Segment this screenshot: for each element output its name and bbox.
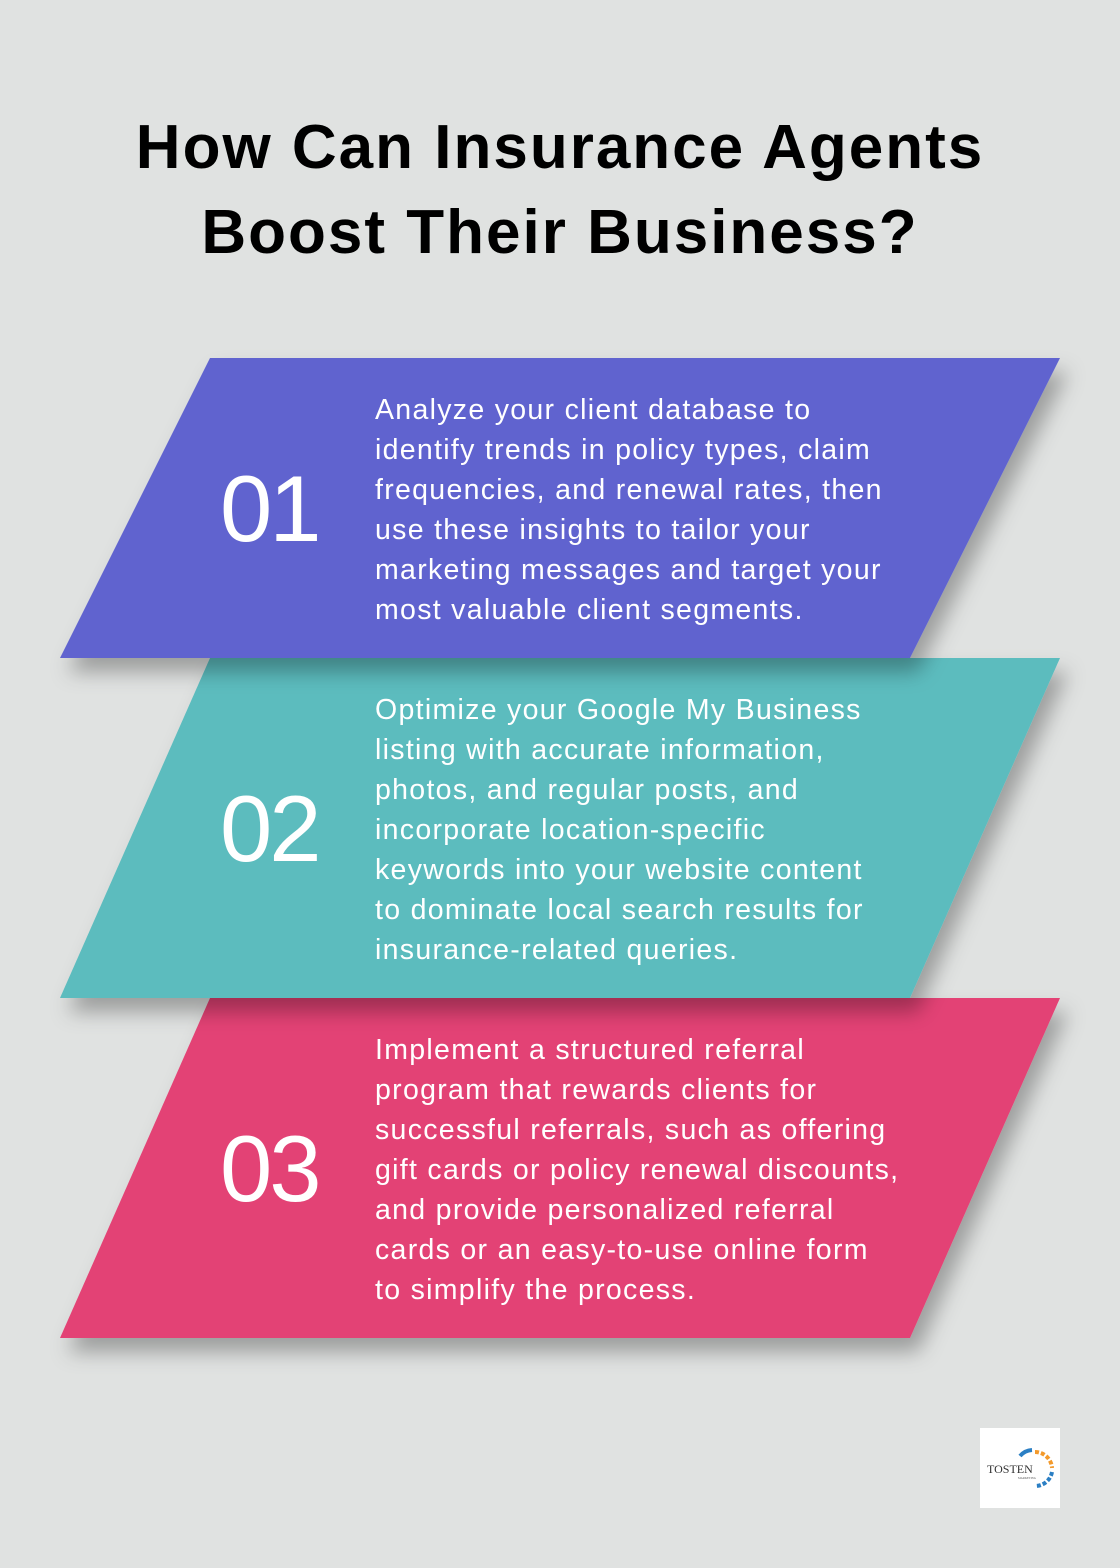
number 02: 02 (220, 776, 319, 881)
text 01: frequencies, and renewal rates, then (375, 474, 883, 506)
text 03: to simplify the process. (375, 1274, 696, 1306)
text 02: Optimize your Google My Business (375, 694, 862, 726)
text 01: identify trends in policy types, claim (375, 434, 871, 466)
number 01: 01 (220, 456, 319, 561)
text 03: program that rewards clients for (375, 1074, 817, 1106)
logo: TOSTEN (987, 1462, 1033, 1476)
text 02: listing with accurate information, (375, 734, 825, 766)
text 03: successful referrals, such as offering (375, 1114, 886, 1146)
text 02: photos, and regular posts, and (375, 774, 799, 806)
text 03: gift cards or policy renewal discounts, (375, 1154, 899, 1186)
title: Boost Their Business? (201, 198, 919, 267)
number 03: 03 (220, 1116, 319, 1221)
text 01: Analyze your client database to (375, 394, 811, 426)
title (136, 113, 984, 267)
text 01: most valuable client segments. (375, 594, 804, 626)
text 02 (375, 694, 864, 966)
text 03: and provide personalized referral (375, 1194, 835, 1226)
text 01 (375, 394, 883, 626)
panel 3 shape (60, 998, 1060, 1338)
text 02: to dominate local search results for (375, 894, 864, 926)
title: How Can Insurance Agents (136, 113, 984, 182)
text 02: keywords into your website content (375, 854, 863, 886)
logo: MARKETING (1018, 1476, 1037, 1480)
panel 2 shape (60, 658, 1060, 998)
text 03: cards or an easy-to-use online form (375, 1234, 869, 1266)
text 01: use these insights to tailor your (375, 514, 811, 546)
panel 1 shape (60, 358, 1060, 658)
text 03: Implement a structured referral (375, 1034, 805, 1066)
text 03 (375, 1034, 899, 1306)
text 01: marketing messages and target your (375, 554, 882, 586)
text 02: incorporate location-specific (375, 814, 766, 846)
logo (980, 1428, 1060, 1508)
text 02: insurance-related queries. (375, 934, 738, 966)
